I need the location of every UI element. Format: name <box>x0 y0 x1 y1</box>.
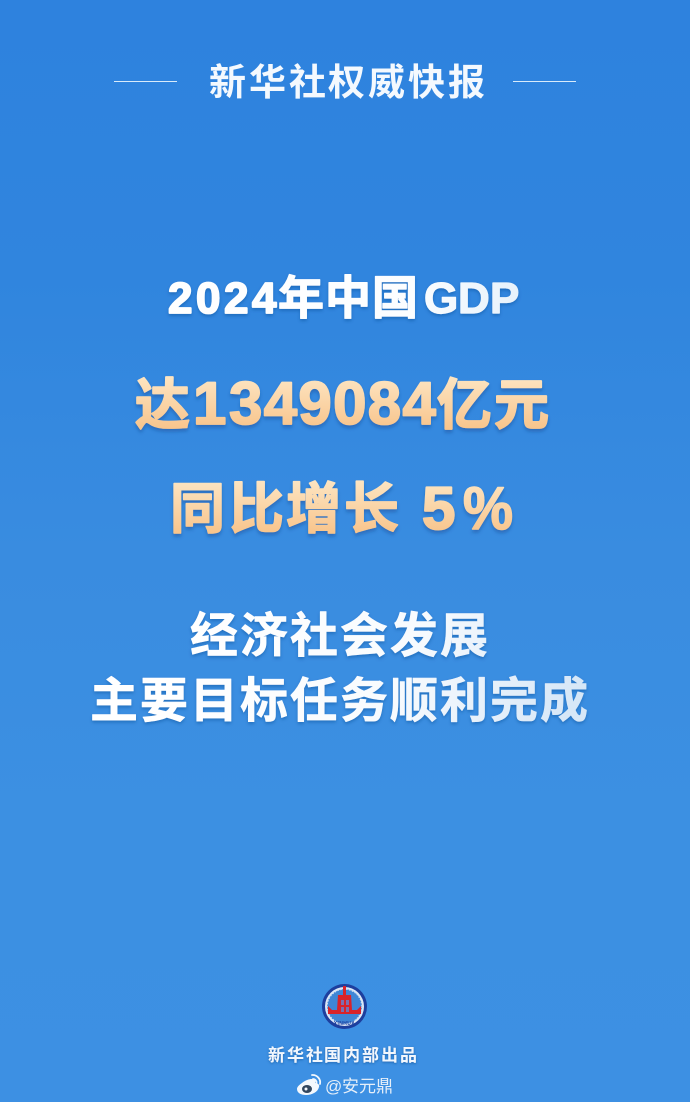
headline: GDP value: 1349084 <box>193 370 436 437</box>
headline: GDP year: 2024 <box>168 274 277 323</box>
headline: GDP year <box>168 262 519 328</box>
weibo username: 安元鼎 <box>342 1072 393 1097</box>
footer credit: 新华社国内部出品 <box>268 1041 417 1066</box>
headline: GDP value: 亿元 <box>437 360 549 440</box>
header title: 新华社权威快报 <box>209 52 485 106</box>
headline: growth rate: 5 <box>422 475 455 542</box>
headline: GDP value: 达 <box>135 360 190 440</box>
headline: growth rate: 同比增长 <box>170 464 399 544</box>
header rule left <box>114 81 177 82</box>
summary line one: 经济社会发展 <box>190 596 488 666</box>
headline: GDP value <box>135 360 549 440</box>
headline: growth rate: % <box>463 475 513 542</box>
headline: GDP year: 年中国 <box>278 262 418 328</box>
icon: weibo <box>297 1075 320 1095</box>
headline: GDP year: GDP <box>424 274 519 323</box>
headline: growth rate <box>170 464 513 544</box>
icon: Xinhua logo: XINHUA <box>334 1021 355 1027</box>
summary line two: 主要目标任务顺利完成 <box>90 661 588 731</box>
icon: Xinhua logo <box>322 984 367 1029</box>
header rule right <box>513 81 576 82</box>
weibo username: @ <box>325 1077 342 1096</box>
